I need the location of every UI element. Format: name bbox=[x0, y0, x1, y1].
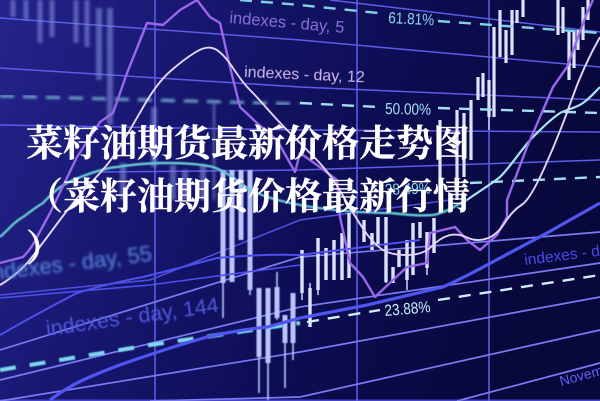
title: 菜籽油期货最新价格走势图 bbox=[26, 124, 470, 165]
label: 23.88 percent: 23.88% bbox=[384, 299, 431, 320]
blue 55 and 144 day lines bbox=[0, 203, 600, 400]
label: indexes day 5: indexes - day, 5 bbox=[229, 9, 345, 37]
candlesticks: faint left group bbox=[13, 0, 214, 200]
moving average curve: light cyan bbox=[467, 87, 600, 200]
moving average curve: teal bbox=[0, 163, 467, 237]
title bbox=[26, 124, 470, 270]
label: indexes day 12: indexes - day, 12 bbox=[244, 64, 365, 86]
title: ） bbox=[26, 229, 63, 270]
label: 61.81 percent: 61.81% bbox=[388, 10, 435, 29]
label: indexes day 144: indexes - day, 144 bbox=[44, 293, 220, 341]
label: 50.00 percent: 50.00% bbox=[385, 101, 431, 119]
moving average curve: pale 12 day bbox=[0, 37, 600, 285]
label: 38.49 percent: 38.49% bbox=[385, 180, 431, 199]
candlesticks: right group bbox=[302, 0, 588, 327]
moving average curve: purple 5 day bbox=[0, 0, 593, 297]
candlesticks: middle group bbox=[223, 170, 293, 400]
title: （菜籽油期货价格最新行情 bbox=[26, 176, 470, 218]
